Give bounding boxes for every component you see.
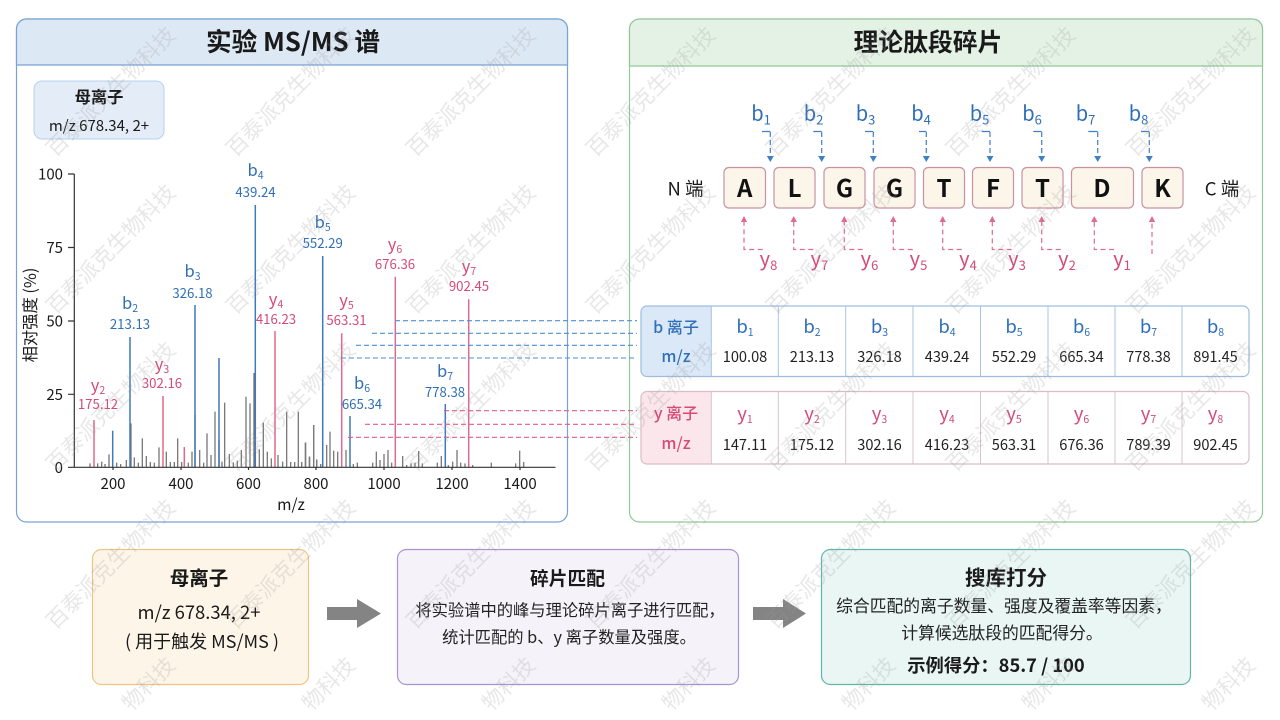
peak labels: b ions: 2 bbox=[132, 301, 138, 316]
watermarks: 百泰派克生物科技 bbox=[38, 334, 182, 478]
b-ion cleavage arrows: 7 bbox=[1088, 110, 1095, 128]
table: b ions: 1 bbox=[748, 325, 754, 340]
peptide sequence: A bbox=[736, 169, 753, 204]
watermarks: 物科技 bbox=[294, 649, 362, 717]
flow box: fragment matching: 碎片匹配 bbox=[530, 564, 605, 591]
peak labels: y ions: 902.45 bbox=[449, 276, 489, 295]
peptide sequence: D bbox=[1093, 169, 1111, 204]
watermarks: 百泰派克生物科技 bbox=[38, 19, 182, 163]
watermarks: 百泰派克生物科技 bbox=[938, 334, 1082, 478]
watermarks: 百泰派克生物科技 bbox=[758, 334, 902, 478]
peak labels: y ions: 302.16 bbox=[142, 373, 182, 392]
table: y ions: y bbox=[1208, 400, 1217, 426]
table: b ions: 552.29 bbox=[992, 346, 1036, 367]
y-ion cleavage arrows: y bbox=[760, 243, 770, 272]
callout: precursor ion bbox=[34, 81, 164, 139]
peptide sequence: G bbox=[836, 169, 853, 204]
b-ion cleavage arrows: 6 bbox=[1035, 110, 1042, 128]
chart axes: 200 bbox=[101, 473, 125, 494]
peak labels: y ions: 7 bbox=[470, 264, 476, 279]
watermarks: 百泰派克生物科技 bbox=[398, 334, 542, 478]
watermarks: 百泰派克生物科技 bbox=[758, 492, 902, 635]
chart axes: 100 bbox=[38, 164, 63, 184]
chart axes: 25 bbox=[46, 384, 63, 405]
table: b ions: 7 bbox=[1151, 325, 1157, 340]
table: y ions: 416.23 bbox=[925, 434, 969, 455]
peak labels: b ions: b bbox=[437, 358, 447, 382]
bar chart: MS/MS spectrum peaks bbox=[90, 205, 524, 468]
y-ion cleavage arrows: 6 bbox=[871, 255, 878, 274]
table: y ions: 1 bbox=[747, 412, 753, 427]
table: b ions: 2 bbox=[815, 325, 821, 340]
flow box: database search score: 综合匹配的离子数量、强度及覆盖率等因素， bbox=[836, 593, 1172, 617]
table: y ions: y bbox=[1074, 400, 1083, 426]
y-ion cleavage arrows: y bbox=[1058, 243, 1069, 272]
table: y ions: y bbox=[1006, 400, 1016, 426]
watermarks: 百泰派克生物科技 bbox=[218, 334, 362, 478]
table: y ions: 902.45 bbox=[1193, 434, 1238, 455]
watermarks: 物科技 bbox=[654, 649, 722, 717]
b-ion cleavage arrows: b bbox=[804, 98, 816, 126]
y-ion cleavage arrows: y bbox=[910, 243, 920, 272]
chart axes: 相对强度 (%) bbox=[17, 268, 41, 362]
panel: theoretical peptide fragments bbox=[630, 19, 1262, 522]
watermarks: 百泰派克生物科技 bbox=[1118, 19, 1262, 163]
table: y ions: 175.12 bbox=[790, 434, 834, 455]
peptide sequence: T bbox=[1035, 169, 1050, 204]
table: y ions: y bbox=[939, 400, 949, 426]
y-ion cleavage arrows: 4 bbox=[970, 255, 977, 274]
watermarks: 物科技 bbox=[1014, 649, 1082, 717]
table: y ions: 6 bbox=[1083, 412, 1089, 427]
watermarks: 百泰派克生物科技 bbox=[218, 19, 362, 163]
watermarks: 百泰派克生物科技 bbox=[1118, 334, 1262, 478]
y-ion cleavage arrows: y bbox=[1008, 243, 1019, 272]
y-ion cleavage arrows bbox=[741, 216, 1155, 274]
table: b ions: 100.08 bbox=[723, 346, 767, 367]
b-ion cleavage arrows: 8 bbox=[1141, 110, 1148, 128]
table: b ions: b bbox=[1140, 313, 1151, 339]
watermarks: 百泰派克生物科技 bbox=[578, 334, 722, 478]
peak labels: b ions: b bbox=[184, 258, 195, 282]
peak labels: b ions bbox=[110, 157, 465, 413]
peptide sequence: N 端 bbox=[667, 176, 704, 202]
peak labels: y ions: y bbox=[388, 231, 396, 255]
watermarks: 百泰派克生物科技 bbox=[1118, 177, 1262, 320]
b-ion cleavage arrows: 3 bbox=[868, 110, 875, 128]
peak labels: b ions: 665.34 bbox=[342, 394, 382, 413]
peak labels: b ions: 5 bbox=[325, 220, 331, 235]
y-ion cleavage arrows: 7 bbox=[821, 255, 828, 274]
watermarks: 百泰派克生物科技 bbox=[398, 177, 542, 320]
chart axes: 600 bbox=[236, 473, 261, 494]
flow box: precursor ion: m/z 678.34, 2+ bbox=[138, 599, 260, 625]
watermarks: 百泰派克生物科技 bbox=[218, 177, 362, 320]
watermarks: 物科技 bbox=[834, 649, 902, 717]
peak labels: b ions: b bbox=[247, 157, 258, 181]
watermarks: 百泰派克生物科技 bbox=[938, 19, 1082, 163]
b-ion cleavage arrows: b bbox=[856, 98, 868, 126]
table: b ions: b bbox=[871, 313, 882, 339]
table: b ions: 6 bbox=[1084, 325, 1090, 340]
peak labels: b ions: 3 bbox=[195, 269, 201, 284]
y-ion cleavage arrows: 3 bbox=[1019, 255, 1026, 274]
table: y ions: y bbox=[804, 400, 814, 426]
peak labels: y ions: y bbox=[269, 286, 277, 310]
table: b ions: m/z bbox=[661, 343, 691, 367]
chart axes: 400 bbox=[169, 473, 193, 494]
panel header: theoretical fragments: 理论肽段碎片 bbox=[854, 23, 1002, 59]
table: y ions: m/z bbox=[661, 430, 691, 454]
b-ion cleavage arrows: b bbox=[751, 98, 764, 126]
watermarks: 百泰派克生物科技 bbox=[38, 492, 182, 635]
peak labels: b ions: 326.18 bbox=[172, 283, 213, 302]
flow box: fragment matching: 统计匹配的 b、y 离子数量及强度。 bbox=[442, 624, 696, 648]
flow box: fragment matching bbox=[398, 550, 738, 684]
table: y ions: y bbox=[872, 400, 881, 426]
peak labels: y ions: 416.23 bbox=[256, 309, 296, 328]
peak labels: b ions: 213.13 bbox=[110, 314, 150, 333]
table: y ions bbox=[641, 392, 1249, 464]
watermarks: 百泰派克生物科技 bbox=[938, 492, 1082, 635]
chart axes: m/z bbox=[277, 493, 305, 515]
table: y ions: 2 bbox=[814, 412, 820, 427]
peptide sequence: L bbox=[788, 169, 801, 204]
chart axes bbox=[17, 164, 556, 515]
watermarks: 百泰派克生物科技 bbox=[758, 177, 902, 320]
flow box: database search score: 搜库打分 bbox=[965, 561, 1047, 591]
y-ion cleavage arrows: y bbox=[861, 243, 871, 272]
table: y ions: 676.36 bbox=[1059, 434, 1104, 455]
peptide sequence: T bbox=[936, 169, 952, 204]
peak labels: b ions: 552.29 bbox=[303, 233, 343, 252]
peak labels: y ions: 563.31 bbox=[326, 310, 367, 329]
peptide sequence: K bbox=[1154, 169, 1171, 204]
table: b ions: 5 bbox=[1017, 325, 1023, 340]
table: b ions: b 离子 bbox=[653, 314, 699, 338]
table: y ions: 147.11 bbox=[723, 434, 767, 455]
blue b-ion peaks bbox=[113, 205, 445, 467]
table: y ions: 4 bbox=[949, 412, 955, 427]
table: y ions: 789.39 bbox=[1126, 434, 1171, 455]
peak labels: b ions: 778.38 bbox=[425, 382, 465, 401]
watermarks: 百泰派克生物科技 bbox=[578, 177, 722, 320]
table: b ions: 439.24 bbox=[925, 346, 969, 367]
table: b ions: 8 bbox=[1218, 325, 1224, 340]
table: b ions: b bbox=[1073, 313, 1084, 339]
peak labels: y ions: 175.12 bbox=[78, 394, 118, 413]
table: y ions: 563.31 bbox=[992, 434, 1036, 455]
b-ion cleavage arrows: 5 bbox=[982, 110, 989, 128]
peak labels: b ions: 4 bbox=[258, 168, 264, 183]
flow box: database search score: 示例得分：85.7 / 100 bbox=[907, 652, 1085, 678]
flow box: precursor ion: 母离子 bbox=[170, 562, 228, 591]
peak labels: y ions: 5 bbox=[348, 298, 354, 313]
arrow: precursor to matching bbox=[327, 599, 381, 628]
peptide sequence bbox=[667, 168, 1239, 208]
table: b ions: 326.18 bbox=[857, 346, 902, 367]
chart axes: 0 bbox=[55, 457, 63, 478]
watermarks: 物科技 bbox=[114, 649, 182, 717]
chart axes: 1400 bbox=[503, 473, 537, 494]
peak labels: b ions: b bbox=[315, 209, 325, 233]
dashed connectors: y-ion peaks to table bbox=[348, 411, 637, 437]
y-ion cleavage arrows: 1 bbox=[1124, 255, 1131, 274]
chart axes: 800 bbox=[304, 473, 328, 494]
b-ion cleavage arrows: b bbox=[911, 98, 924, 126]
pink y-ion peaks bbox=[94, 277, 469, 467]
table: y ions: y bbox=[737, 400, 747, 426]
peptide sequence: F bbox=[986, 169, 1000, 204]
panel: experimental MS/MS spectrum bbox=[16, 19, 568, 522]
table: y ions: 7 bbox=[1150, 412, 1156, 427]
peak labels: y ions: 676.36 bbox=[375, 254, 415, 273]
peak labels: b ions: 7 bbox=[447, 369, 453, 384]
b-ion cleavage arrows: 4 bbox=[924, 110, 931, 128]
y-ion cleavage arrows: y bbox=[811, 243, 821, 272]
peak labels: y ions: 2 bbox=[99, 383, 105, 398]
peak labels: y ions: y bbox=[155, 351, 163, 375]
peak labels: b ions: b bbox=[354, 370, 364, 394]
chart axes: 50 bbox=[46, 310, 63, 332]
table: b ions: b bbox=[938, 313, 950, 339]
table: b ions: 665.34 bbox=[1059, 346, 1104, 367]
flow box: precursor ion bbox=[92, 550, 308, 684]
peak labels: y ions: 6 bbox=[396, 242, 402, 257]
dashed connectors: b-ion peaks to table bbox=[341, 321, 637, 358]
b-ion cleavage arrows: b bbox=[970, 98, 982, 126]
watermarks: 百泰派克生物科技 bbox=[938, 177, 1082, 320]
panel header: theoretical fragments bbox=[630, 19, 1262, 66]
peak labels: b ions: 439.24 bbox=[235, 182, 276, 201]
b-ion cleavage arrows: 1 bbox=[764, 110, 771, 128]
table: b ions: b bbox=[736, 313, 748, 339]
y-ion cleavage arrows: 5 bbox=[920, 255, 927, 274]
b-ion cleavage arrows bbox=[751, 98, 1153, 162]
watermarks: 百泰派克生物科技 bbox=[38, 177, 182, 320]
callout: precursor ion: 母离子 bbox=[75, 84, 123, 108]
watermarks: 百泰派克生物科技 bbox=[1118, 492, 1262, 635]
table: y ions: 302.16 bbox=[857, 434, 902, 455]
peak labels: y ions: 4 bbox=[277, 297, 283, 312]
y-ion cleavage arrows: 8 bbox=[770, 255, 777, 274]
watermarks: 百泰派克生物科技 bbox=[398, 492, 542, 635]
b-ion cleavage arrows: 2 bbox=[816, 110, 823, 128]
table: b ions: 4 bbox=[950, 325, 956, 340]
watermarks: 百泰派克生物科技 bbox=[578, 492, 722, 635]
peak labels: y ions bbox=[78, 231, 489, 413]
panel header: experimental spectrum bbox=[16, 19, 568, 65]
watermarks: 百泰派克生物科技 bbox=[218, 492, 362, 635]
b-ion cleavage arrows: b bbox=[1022, 98, 1035, 126]
table: b ions: b bbox=[1207, 313, 1218, 339]
table: b ions: b bbox=[803, 313, 815, 339]
table: y ions: 3 bbox=[881, 412, 887, 427]
peptide sequence: C 端 bbox=[1205, 176, 1239, 202]
chart axes: 1200 bbox=[435, 473, 469, 494]
chart axes: 1000 bbox=[367, 473, 401, 494]
table: b ions: 3 bbox=[882, 325, 888, 340]
flow box: precursor ion: ( 用于触发 MS/MS ) bbox=[125, 628, 279, 654]
table: b ions: 213.13 bbox=[790, 346, 834, 367]
table: b ions: b bbox=[1005, 313, 1017, 339]
y-ion cleavage arrows: 2 bbox=[1069, 255, 1076, 274]
arrow: matching to scoring bbox=[753, 599, 806, 628]
peak labels: y ions: y bbox=[339, 287, 348, 311]
chart axes: 75 bbox=[46, 237, 63, 258]
table: y ions: y 离子 bbox=[654, 400, 698, 424]
watermarks: 物科技 bbox=[1194, 649, 1262, 717]
table: b ions bbox=[641, 306, 1249, 376]
flow box: database search score: 计算候选肽段的匹配得分。 bbox=[901, 620, 1103, 644]
peak labels: b ions: b bbox=[122, 290, 132, 314]
peak labels: y ions: y bbox=[462, 253, 470, 277]
flow box: fragment matching: 将实验谱中的峰与理论碎片离子进行匹配， bbox=[415, 597, 725, 621]
watermarks: 物科技 bbox=[474, 649, 542, 717]
b-ion cleavage arrows: b bbox=[1076, 98, 1088, 126]
table: y ions: 8 bbox=[1217, 412, 1223, 427]
y-ion cleavage arrows: y bbox=[1113, 243, 1124, 272]
watermarks: 百泰派克生物科技 bbox=[758, 19, 902, 163]
watermarks: 百泰派克生物科技 bbox=[578, 19, 722, 163]
table: y ions: 5 bbox=[1016, 412, 1022, 427]
flow box: database search score bbox=[822, 550, 1190, 684]
b-ion cleavage arrows: b bbox=[1129, 98, 1141, 126]
peak labels: b ions: 6 bbox=[364, 381, 370, 396]
table: y ions: y bbox=[1141, 400, 1150, 426]
peak labels: y ions: 3 bbox=[163, 362, 169, 377]
watermarks: 百泰派克生物科技 bbox=[398, 19, 542, 163]
peak labels: y ions: y bbox=[91, 372, 99, 396]
y-ion cleavage arrows: y bbox=[959, 243, 970, 272]
table: b ions: 778.38 bbox=[1126, 346, 1171, 367]
panel header: experimental spectrum: 实验 MS/MS 谱 bbox=[206, 22, 380, 59]
peptide sequence: G bbox=[886, 169, 903, 204]
callout: precursor ion: m/z 678.34, 2+ bbox=[49, 115, 149, 136]
table: b ions: 891.45 bbox=[1193, 346, 1238, 367]
